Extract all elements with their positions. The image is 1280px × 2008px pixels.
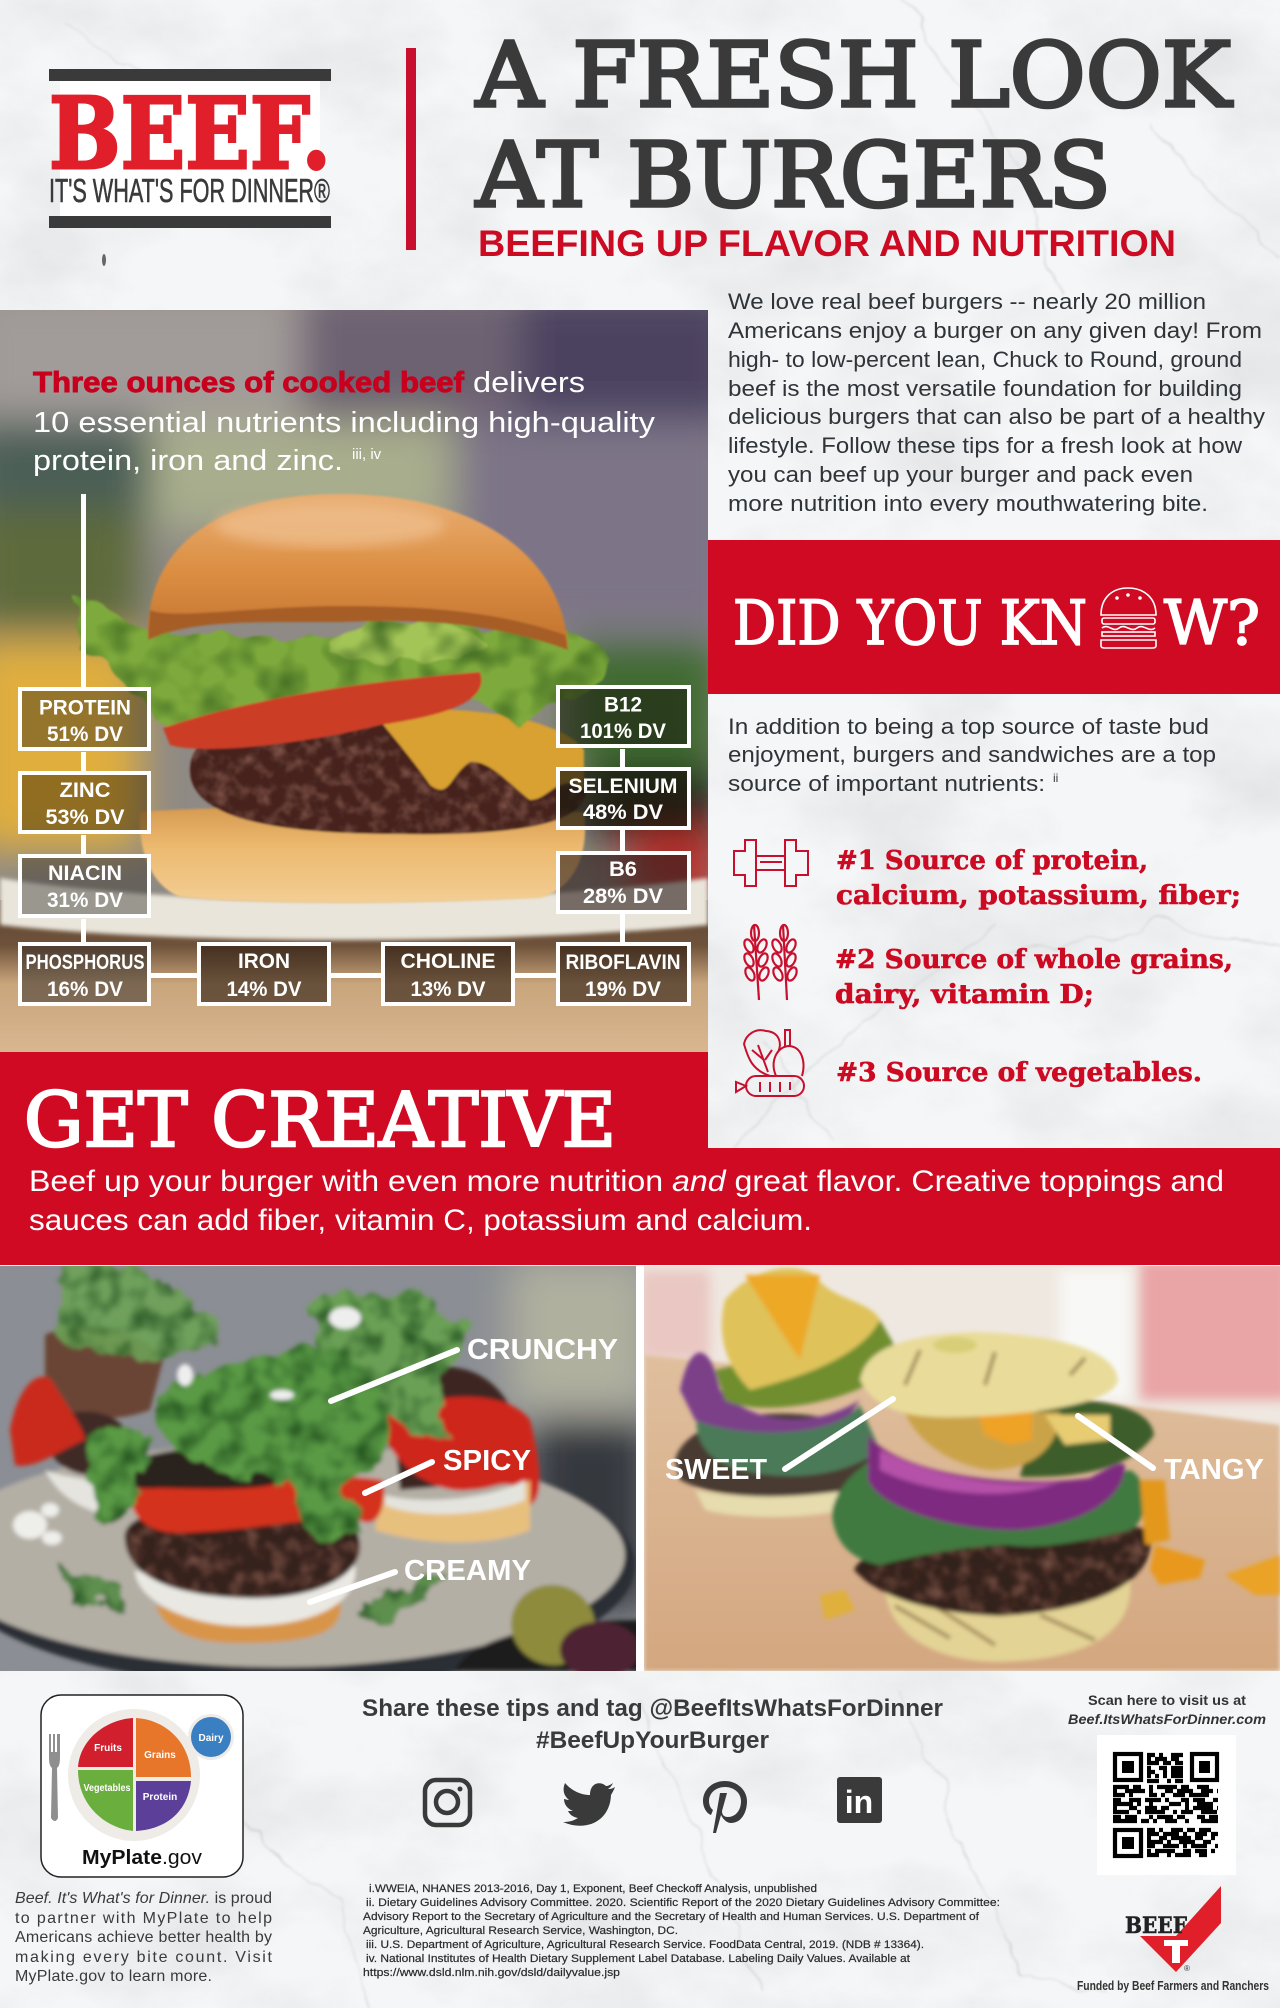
nutrient: iron bbox=[199, 944, 329, 1004]
icon: instagram bbox=[425, 1780, 470, 1825]
list item 1: calcium, potassium, fiber; bbox=[836, 881, 1241, 911]
intro paragraph: lifestyle. Follow these tips for a fresh look at how bbox=[728, 433, 1243, 458]
share heading bbox=[362, 1695, 943, 1754]
nutrient: niacin bbox=[20, 856, 149, 916]
references: Advisory Report to the Secretary of Agriculture and the Secretary of Health and Human Services. U.S. Department of bbox=[363, 1911, 980, 1923]
references: ii. Dietary Guidelines Advisory Committee. 2020. Scientific Report of the 2020 Dietary Guidelines Advisory Committee: bbox=[366, 1897, 1000, 1909]
nutrient: iron: IRON bbox=[238, 950, 290, 973]
icon: pinterest bbox=[703, 1781, 747, 1833]
icon: linkedin bbox=[837, 1777, 882, 1823]
list item 1 bbox=[836, 846, 1241, 911]
orange pieces bbox=[1140, 1480, 1170, 1545]
header divider bbox=[406, 48, 416, 250]
panel: photo crunchy spicy creamy bbox=[0, 1260, 650, 1687]
panel: photo sweet tangy bbox=[640, 1260, 1280, 1671]
callout: spicy bbox=[365, 1445, 531, 1493]
plate chart: Dairy bbox=[198, 1733, 224, 1744]
nutrient: b12 bbox=[558, 687, 689, 746]
icon: wheat bbox=[742, 925, 799, 1000]
callout: sweet: SWEET bbox=[665, 1454, 767, 1486]
icon: twitter bbox=[563, 1783, 615, 1826]
did you know paragraph: enjoyment, burgers and sandwiches are a top bbox=[728, 742, 1216, 767]
nutrient: niacin: 31% DV bbox=[47, 889, 123, 912]
myplate paragraph bbox=[15, 1890, 273, 1985]
nutrient: selenium: 48% DV bbox=[583, 801, 663, 824]
myplate paragraph: Americans achieve better health by bbox=[15, 1929, 272, 1946]
nutrient: phosphorus: PHOSPHORUS bbox=[26, 951, 144, 974]
intro text on photo: protein, iron and zinc. bbox=[33, 445, 343, 477]
references: https://www.dsld.nlm.nih.gov/dsld/dailyvalue.jsp bbox=[363, 1967, 620, 1979]
myplate paragraph: making every bite count. Visit bbox=[15, 1949, 273, 1966]
did you know paragraph bbox=[728, 714, 1216, 796]
nutrient: b6 bbox=[558, 853, 689, 912]
share heading: Share these tips and tag @BeefItsWhatsForDinner bbox=[362, 1695, 943, 1722]
did you know paragraph: ii bbox=[1053, 771, 1058, 785]
plate chart bbox=[68, 1709, 234, 1841]
nutrient: riboflavin: 19% DV bbox=[585, 978, 661, 1001]
intro paragraph: beef is the most versatile foundation for building bbox=[728, 376, 1242, 401]
references: i.WWEIA, NHANES 2013-2016, Day 1, Exponent, Beef Checkoff Analysis, unpublished bbox=[369, 1883, 817, 1895]
intro paragraph: Americans enjoy a burger on any given day! From bbox=[728, 318, 1262, 343]
nutrient: phosphorus: 16% DV bbox=[47, 978, 123, 1001]
callout: crunchy: CRUNCHY bbox=[467, 1334, 618, 1366]
intro paragraph: We love real beef burgers -- nearly 20 million bbox=[728, 289, 1206, 314]
olives bbox=[455, 1620, 640, 1671]
icon: fork bbox=[49, 1734, 60, 1821]
plate chart: Protein bbox=[143, 1792, 177, 1803]
did you know banner bbox=[708, 540, 1280, 694]
rear burgers bbox=[45, 1327, 163, 1418]
plate crumbs and greens bbox=[13, 1511, 47, 1539]
callout: tangy: TANGY bbox=[1164, 1454, 1264, 1486]
white gutter between photos bbox=[636, 1265, 644, 1671]
nutrient: b6: B6 bbox=[609, 858, 637, 881]
nutrient: riboflavin bbox=[558, 944, 689, 1004]
logo: Beef It's What's For Dinner bbox=[49, 69, 331, 228]
nutrient: selenium bbox=[558, 769, 689, 828]
callout: tangy bbox=[1078, 1416, 1264, 1486]
intro paragraph: more nutrition into every mouthwatering bite. bbox=[728, 491, 1208, 516]
intro paragraph: you can beef up your burger and pack even bbox=[728, 462, 1193, 487]
myplate wordmark: MyPlate.gov bbox=[82, 1847, 202, 1869]
icon: vegetables bbox=[736, 1030, 804, 1096]
panel: did you know bbox=[708, 540, 1280, 1096]
photo: arugula burger bbox=[0, 1260, 650, 1687]
scan text bbox=[1068, 1692, 1266, 1727]
logo: Beef It's What's For Dinner: IT'S WHAT'S FOR DINNER® bbox=[49, 172, 330, 209]
myplate paragraph: to partner with MyPlate to help bbox=[15, 1910, 272, 1927]
main burger bbox=[885, 1580, 1130, 1662]
intro paragraph: high- to low-percent lean, Chuck to Round, ground bbox=[728, 347, 1242, 372]
references: iii. U.S. Department of Agriculture, Agricultural Research Service. FoodData Central, 2019. (NDB # 13364). bbox=[366, 1939, 924, 1951]
scan text: Beef.ItsWhatsForDinner.com bbox=[1068, 1711, 1266, 1727]
callout: creamy bbox=[310, 1555, 531, 1602]
list item 2 bbox=[835, 945, 1233, 1010]
list item 2: dairy, vitamin D; bbox=[835, 980, 1094, 1010]
nutrient: protein: PROTEIN bbox=[39, 696, 131, 720]
get creative text: Beef up your burger with even more nutrition and great flavor. Creative toppings and bbox=[29, 1165, 1224, 1198]
myplate paragraph: MyPlate.gov to learn more. bbox=[15, 1968, 212, 1985]
nutrient: choline: CHOLINE bbox=[400, 950, 496, 973]
plate chart: Fruits bbox=[94, 1743, 122, 1754]
subtitle: BEEFING UP FLAVOR AND NUTRITION bbox=[478, 223, 1176, 264]
nutrient: b12: B12 bbox=[604, 694, 642, 716]
title: A FRESH LOOK bbox=[475, 23, 1233, 127]
nutrient: iron: 14% DV bbox=[226, 978, 302, 1001]
intro paragraph: delicious burgers that can also be part of a healthy bbox=[728, 404, 1266, 429]
references bbox=[363, 1883, 1000, 1979]
nutrient: b12: 101% DV bbox=[580, 720, 666, 743]
nutrient: protein: 51% DV bbox=[47, 723, 123, 746]
share heading: #BeefUpYourBurger bbox=[536, 1727, 769, 1754]
plate chart: Grains bbox=[144, 1750, 176, 1761]
qr code bbox=[1097, 1735, 1236, 1875]
intro text on photo: iii, iv bbox=[352, 446, 382, 463]
nutrient connector lines bbox=[81, 494, 625, 978]
photo: cheeseburger bbox=[0, 290, 740, 1052]
list item 1: #1 Source of protein, bbox=[836, 846, 1148, 876]
nutrient: zinc: ZINC bbox=[60, 779, 110, 802]
plate chart: Vegetables bbox=[84, 1783, 131, 1794]
panel: myplate logo bbox=[41, 1695, 243, 1877]
beef checkoff logo bbox=[1125, 1886, 1221, 1973]
photo: pineapple burger bbox=[640, 1260, 1280, 1671]
nutrient: choline: 13% DV bbox=[410, 978, 486, 1001]
intro text on photo bbox=[33, 367, 656, 477]
callout: spicy: SPICY bbox=[443, 1445, 531, 1477]
list item 2: #2 Source of whole grains, bbox=[835, 945, 1233, 975]
main burger bbox=[155, 1600, 341, 1643]
intro paragraph bbox=[728, 289, 1266, 516]
greens bbox=[60, 1265, 465, 1538]
nutrient: protein bbox=[20, 689, 149, 749]
did you know banner: W? bbox=[1164, 588, 1260, 659]
nutrient: niacin: NIACIN bbox=[48, 862, 122, 885]
panel: burger photo with nutrients bbox=[0, 290, 740, 1052]
icon: burger bbox=[1101, 588, 1156, 648]
list item 3: #3 Source of vegetables. bbox=[836, 1058, 1202, 1088]
beef checkoff logo: ® bbox=[1184, 1964, 1190, 1973]
icon: linkedin: in bbox=[845, 1784, 873, 1820]
did you know paragraph: In addition to being a top source of taste bud bbox=[728, 714, 1209, 739]
intro text on photo: 10 essential nutrients including high-quality bbox=[33, 407, 656, 439]
intro text on photo: delivers bbox=[473, 367, 585, 399]
callout: crunchy bbox=[331, 1334, 618, 1401]
callout: sweet bbox=[665, 1399, 893, 1486]
scan text: Scan here to visit us at bbox=[1088, 1692, 1246, 1708]
get creative text: sauces can add fiber, vitamin C, potassium and calcium. bbox=[29, 1204, 812, 1237]
icon: dumbbell bbox=[734, 840, 808, 886]
title bbox=[475, 23, 1233, 227]
logo: Beef It's What's For Dinner: BEEF. bbox=[49, 77, 331, 192]
references: iv. National Institutes of Health Dietary Supplement Label Database. Labeling Daily Values. Available at bbox=[366, 1953, 910, 1965]
nutrient: choline bbox=[383, 944, 513, 1004]
references: Agriculture, Agricultural Research Service, Washington, DC. bbox=[363, 1925, 678, 1937]
nutrient: riboflavin: RIBOFLAVIN bbox=[566, 951, 680, 974]
rear burger bbox=[694, 1487, 842, 1519]
get creative text bbox=[29, 1165, 1224, 1237]
did you know banner: DID YOU KN bbox=[733, 588, 1087, 659]
did you know paragraph: source of important nutrients: bbox=[728, 771, 1045, 796]
nutrient: phosphorus bbox=[20, 944, 149, 1004]
callout: creamy: CREAMY bbox=[404, 1555, 531, 1587]
intro text on photo: Three ounces of cooked beef bbox=[33, 367, 464, 399]
beef checkoff logo: BEEF bbox=[1125, 1913, 1187, 1939]
nutrient: selenium: SELENIUM bbox=[568, 775, 678, 798]
nutrient: zinc bbox=[20, 773, 149, 832]
nutrient: zinc: 53% DV bbox=[46, 806, 124, 829]
title: AT BURGERS bbox=[475, 123, 1111, 227]
panel: get creative bbox=[0, 1052, 1280, 1265]
myplate paragraph: Beef. It's What's for Dinner. is proud bbox=[15, 1890, 272, 1907]
get creative heading: GET CREATIVE bbox=[24, 1076, 616, 1164]
nutrient: b6: 28% DV bbox=[583, 885, 663, 908]
